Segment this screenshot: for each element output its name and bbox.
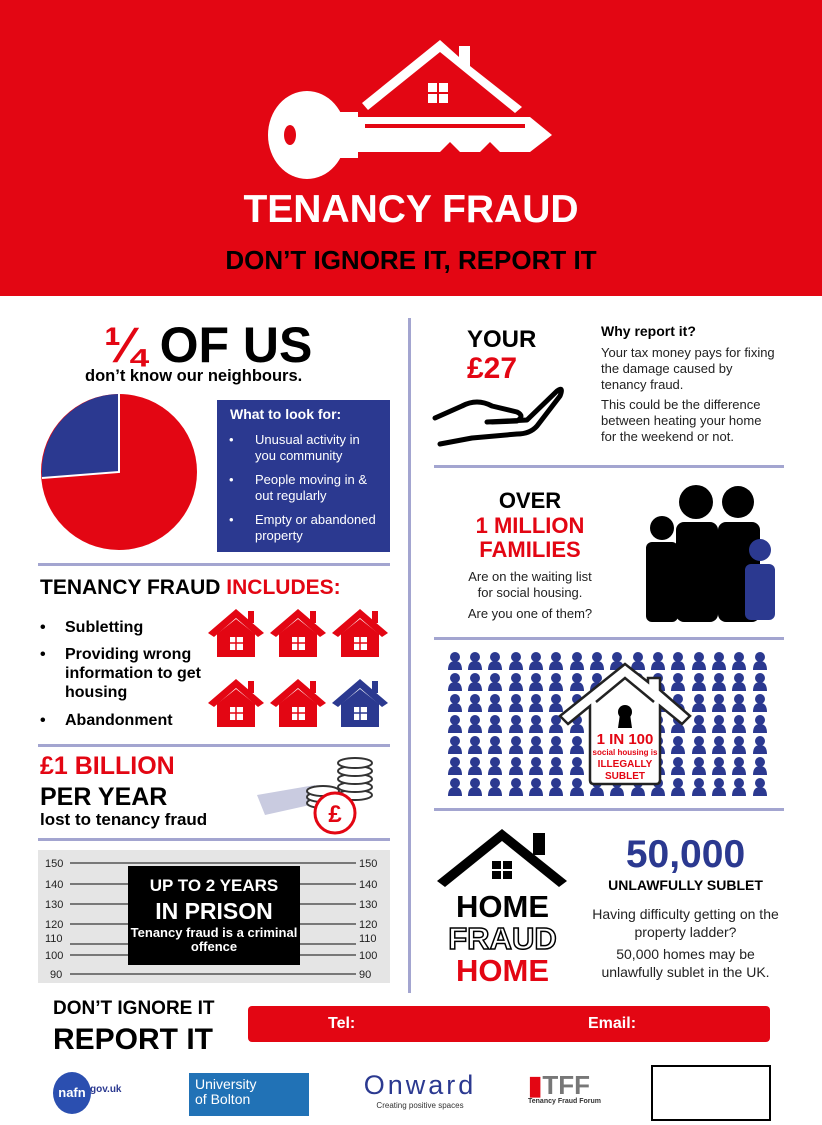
panel: what to look for: What to look for: [230,406,341,422]
text: • [40,619,46,636]
panel: prison height chart: 120 [359,919,377,931]
icon: home fraud home [437,829,567,988]
stat: 50,000 [592,833,779,980]
panel: prison height chart: 110 [359,933,377,945]
panel: what to look for: • [229,512,234,527]
logo: onward: Onward [364,1070,476,1100]
chart: people grid 1 in 100: ILLEGALLY [598,759,653,770]
icon: hand [432,386,564,446]
stat: quarter of us: ¼ OF US [104,317,312,373]
stat: 1 billion: lost to tenancy fraud [40,810,207,829]
stat: 1 billion [40,752,207,829]
panel: prison height chart: 130 [359,899,377,911]
blank box [651,1065,771,1121]
chart: people grid 1 in 100: 1 IN 100 [597,731,653,748]
stat: quarter of us: don’t know our neighbours. [85,367,302,385]
stat: 1 million families: 1 MILLION [476,513,584,538]
stat: your £27: YOUR [467,326,536,353]
heading: tenancy fraud includes: TENANCY FRAUD INCLUDES: [40,576,341,599]
chart: people grid 1 in 100: social housing is [593,748,658,757]
panel: prison height chart [38,850,390,983]
icon: home fraud home: HOME [456,953,549,988]
icon: home fraud home: HOME [456,889,549,924]
stat: 1 million families: Are you one of them? [468,606,592,621]
callout: prison: UP TO 2 YEARS [150,876,278,895]
logo: bolton: University [195,1076,256,1092]
logos: gov.uk [90,1084,121,1095]
text: why report it: Why report it? [601,323,696,339]
stat: 50,000: 50,000 homes may be unlawfully sublet in the UK. [601,946,770,980]
text: Abandonment [65,712,173,729]
icon: coins: £ [328,801,342,828]
callout: prison: IN PRISON [155,898,273,924]
logo: bolton [189,1073,309,1116]
list: includes [40,619,201,729]
logo: tff: Tenancy Fraud Forum [528,1098,601,1105]
footer: report it [53,998,214,1056]
panel: prison height chart: 150 [359,858,377,870]
stat: 1 million families: OVER [499,488,561,513]
stat: 50,000: Having difficulty getting on the property ladder? [592,906,779,940]
panel: prison height chart: 130 [45,899,63,911]
panel: what to look for: Empty or abandoned property [255,512,376,543]
logo: bolton: of Bolton [195,1091,250,1107]
panel: what to look for: • [229,432,234,447]
text: Providing wrong information to get housing [65,646,201,701]
text: why report it: Your tax money pays for fixing the damage caused by tenancy fraud. [601,345,775,392]
logo: onward: Creating positive spaces [376,1101,464,1110]
stat: 1 billion: £1 BILLION [40,752,175,780]
logo: tff: ▮TFF [528,1070,590,1100]
chart: people grid 1 in 100 [448,652,767,796]
subtitle: DON’T IGNORE IT, REPORT IT [225,245,597,275]
callout: prison: Tenancy fraud is a criminal offence [131,925,297,954]
stat: 50,000: 50,000 [626,833,745,876]
text: • [40,712,46,729]
text: why report it [601,323,775,444]
logos [53,1065,771,1121]
panel: prison height chart: 150 [45,858,63,870]
contact bar: Email: [588,1015,636,1032]
stat: 50,000: UNLAWFULLY SUBLET [608,877,763,893]
stat: 1 billion: PER YEAR [40,783,167,811]
contact bar: Tel: [328,1015,355,1032]
icon: key and house [268,40,552,179]
contact bar [248,1006,770,1042]
icon: family [646,485,775,622]
panel: what to look for [217,400,390,552]
stat: 1 million families [468,488,592,621]
stat: your £27 [432,326,564,446]
panel: prison height chart: 90 [50,969,62,981]
panel: prison height chart: 100 [45,950,63,962]
panel: what to look for: People moving in & out regularly [255,472,367,503]
footer: report it: DON’T IGNORE IT [53,998,214,1019]
callout: prison [128,866,300,965]
panel: prison height chart: 140 [45,879,63,891]
panel: what to look for: • [229,472,234,487]
logo: nafn: nafn [58,1085,86,1100]
stat: 1 million families: for social housing. [478,585,582,600]
title: TENANCY FRAUD [243,188,579,231]
text: why report it: This could be the difference between heating your home for the weekend or not. [601,397,761,444]
panel: prison height chart: 90 [359,969,371,981]
chart: people grid 1 in 100: SUBLET [605,771,645,782]
icon: coins [257,757,373,834]
text: • [40,646,46,663]
panel: prison height chart: 100 [359,950,377,962]
panel: what to look for: Unusual activity in you community [255,432,360,463]
logo: nafn [53,1072,91,1114]
footer: report it: REPORT IT [53,1023,213,1056]
header banner [0,0,822,296]
text: Subletting [65,619,143,636]
icon: home fraud home: FRAUD [448,921,557,956]
panel: prison height chart: 120 [45,919,63,931]
stat: 1 million families: FAMILIES [479,537,581,562]
stat: 1 million families: Are on the waiting list [468,569,592,584]
panel: prison height chart: 110 [45,933,63,945]
icon: houses [208,609,388,727]
stat: your £27: £27 [467,352,517,385]
pie chart [41,394,197,550]
panel: prison height chart: 140 [359,879,377,891]
